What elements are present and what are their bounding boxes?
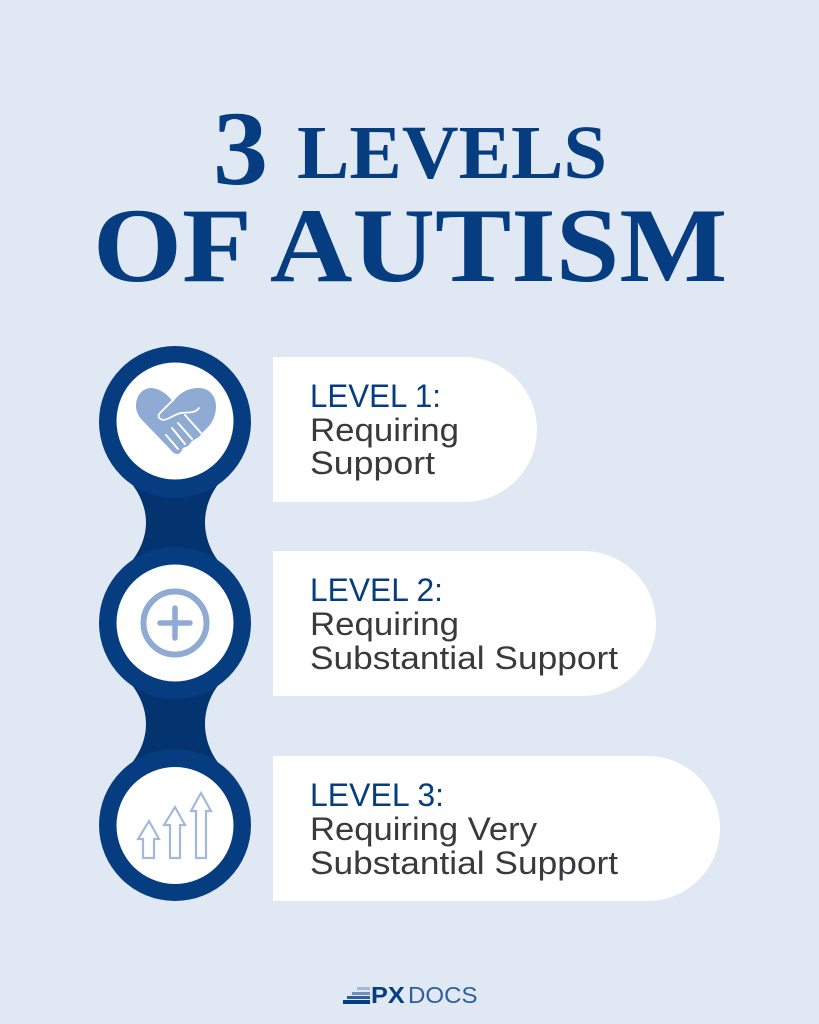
icon: handshake heart	[116, 362, 234, 480]
title: LEVELS	[297, 110, 607, 195]
panel: level 2	[273, 551, 656, 696]
icon: plus in circle	[116, 564, 234, 682]
title	[93, 91, 727, 304]
panel: level 3	[273, 756, 720, 901]
panel: level 3: Requiring Very	[310, 811, 537, 847]
panel: level 1: Support	[310, 445, 435, 481]
panel: level 2: LEVEL 2:	[310, 572, 443, 608]
timeline chain connecting the three circles	[99, 346, 251, 901]
title: 3	[213, 91, 268, 208]
title: OF AUTISM	[93, 187, 727, 304]
panel: level 1: LEVEL 1:	[310, 378, 441, 414]
panel: level 3: Substantial Support	[310, 845, 618, 881]
panel: level 2: Requiring	[310, 606, 459, 642]
logo: PX Docs	[343, 982, 478, 1009]
logo: PX Docs: PX	[371, 983, 405, 1009]
logo: PX Docs: DOCS	[408, 982, 478, 1008]
panel: level 3: LEVEL 3:	[310, 777, 444, 813]
panel: level 1: Requiring	[310, 412, 459, 448]
icon: three rising arrows	[116, 767, 234, 884]
panel: level 2: Substantial Support	[310, 640, 618, 676]
panel: level 1	[273, 357, 537, 502]
